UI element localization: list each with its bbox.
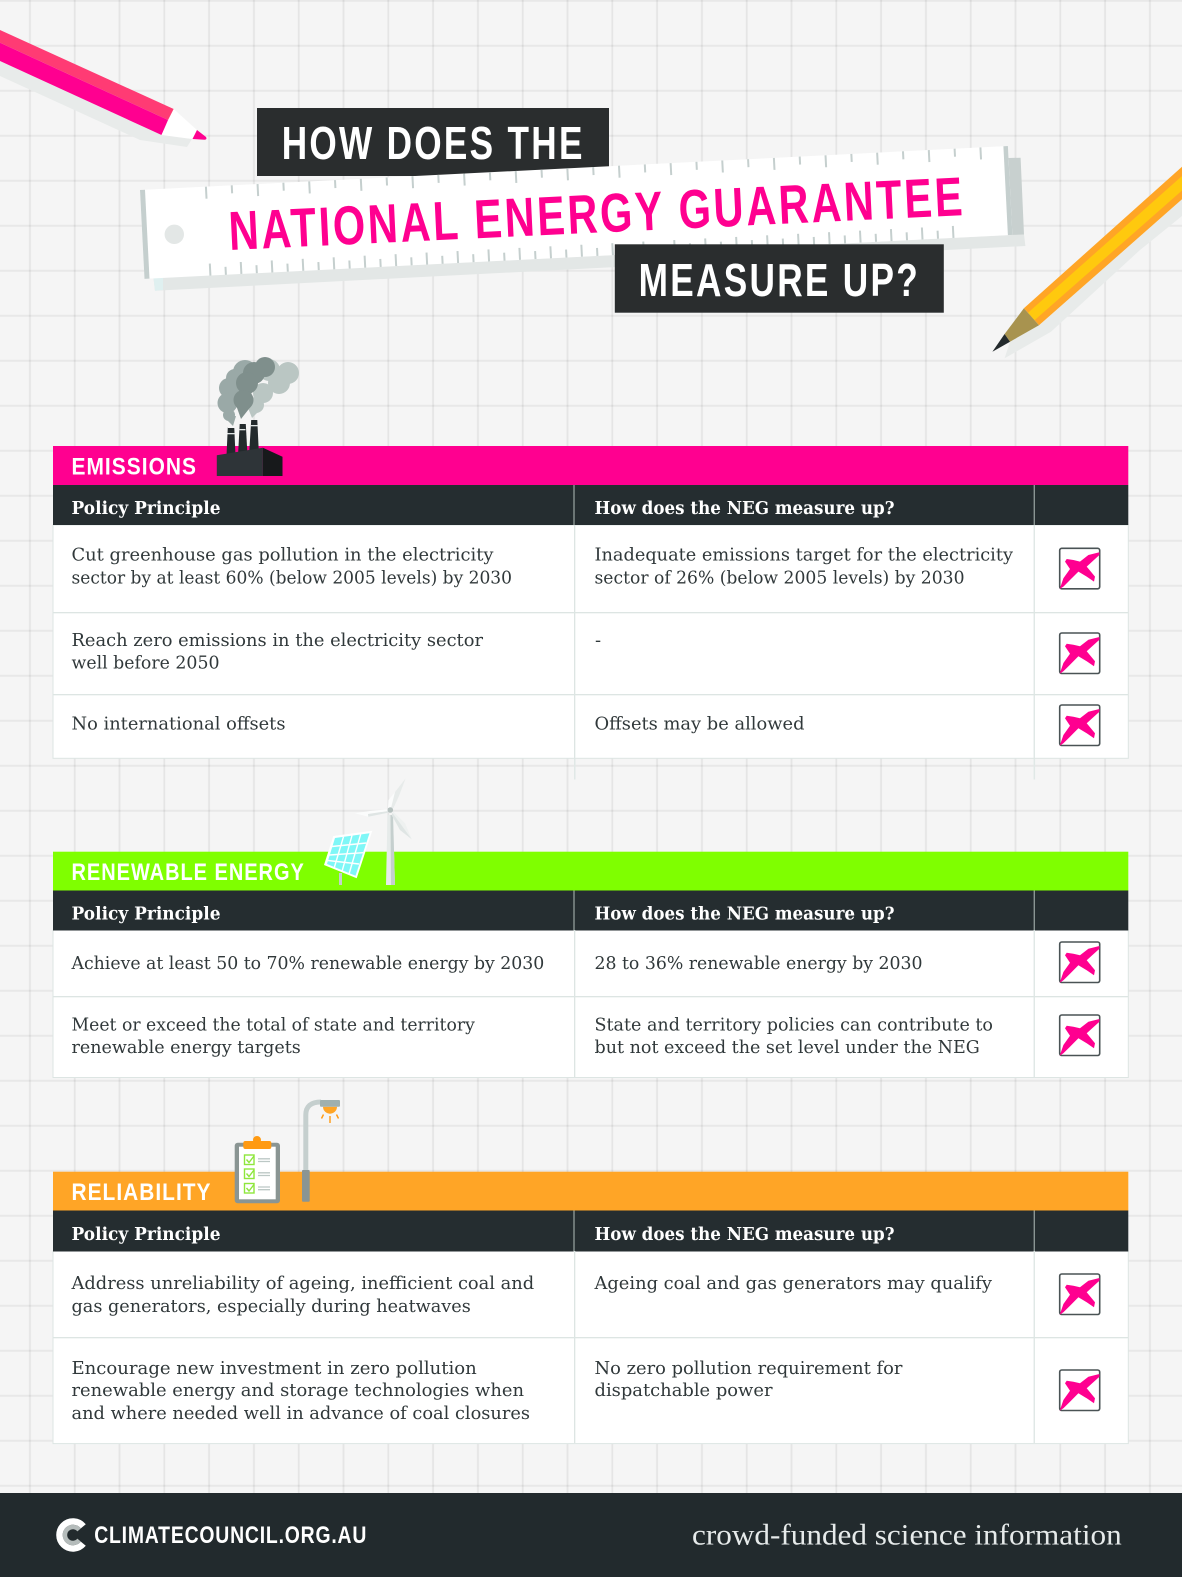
row: achieve renewable energy: 28 to 36% renewable energy by 2030 [594, 953, 922, 974]
row: encourage new investment: dispatchable power [594, 1380, 773, 1401]
icon: cross [1060, 705, 1100, 746]
icon: yellow pencil [992, 167, 1182, 358]
row: state and territory targets: renewable energy targets [72, 1037, 301, 1058]
title: how does the: HOW DOES THE [282, 117, 585, 169]
title: measure up: MEASURE UP? [639, 254, 920, 306]
row: reach zero emissions: - [595, 630, 601, 651]
table header row: Policy Principle [72, 904, 220, 924]
footer url: CLIMATECOUNCIL.ORG.AU [94, 1522, 367, 1549]
icon: cross [1060, 633, 1100, 674]
panel: emissions [53, 357, 1128, 780]
row: encourage new investment: Encourage new investment in zero pollution [72, 1358, 477, 1379]
heading bar: renewable energy [53, 852, 1128, 891]
row: no international offsets [72, 714, 804, 735]
row: unreliability of ageing generators: Address unreliability of ageing, inefficient coal and [71, 1273, 534, 1294]
heading bar: emissions [53, 446, 1128, 485]
footer [0, 1493, 1182, 1577]
table header row: Policy Principle [72, 499, 220, 519]
heading bar: reliability: RELIABILITY [72, 1179, 212, 1206]
table header row [53, 890, 1128, 930]
footer tagline: crowd-funded science information [692, 1518, 1122, 1552]
title: how does the [257, 108, 609, 176]
row: unreliability of ageing generators: Ageing coal and gas generators may qualify [594, 1273, 993, 1294]
heading bar: emissions: EMISSIONS [72, 453, 197, 480]
row: achieve renewable energy: Achieve at least 50 to 70% renewable energy by 2030 [71, 953, 544, 974]
row: state and territory targets: Meet or exceed the total of state and territory [72, 1014, 476, 1036]
row: state and territory targets: but not exceed the set level under the NEG [594, 1037, 980, 1058]
row: state and territory targets: State and territory policies can contribute to [594, 1014, 993, 1036]
row: unreliability of ageing generators [71, 1273, 993, 1317]
row: cut pollution: Cut greenhouse gas pollution in the electricity [72, 545, 494, 566]
panel: renewable energy [53, 778, 1128, 1078]
heading bar: reliability [53, 1172, 1128, 1211]
table header row: Policy Principle [72, 1225, 220, 1245]
row: achieve renewable energy [71, 953, 922, 974]
table header row [53, 1210, 1128, 1252]
heading bar: renewable energy: RENEWABLE ENERGY [72, 859, 305, 886]
table header row [53, 485, 1128, 525]
icon: pink pencil [0, 30, 206, 147]
row: encourage new investment [72, 1358, 903, 1424]
icon: factory with smoke [217, 357, 299, 476]
row: cut pollution: Inadequate emissions target for the electricity [594, 545, 1014, 566]
row: cut pollution [72, 545, 1014, 588]
row: encourage new investment: and where needed well in advance of coal closures [72, 1403, 530, 1424]
table header row: How does the NEG measure up? [594, 1225, 894, 1245]
icon: cross [1060, 548, 1100, 589]
icon: solar panel and wind turbine [324, 778, 412, 885]
icon: cross [1060, 1015, 1100, 1056]
row: encourage new investment: No zero pollution requirement for [594, 1358, 903, 1379]
row: cut pollution: sector of 26% (below 2005 levels) by 2030 [594, 567, 964, 588]
icon: cross [1060, 942, 1100, 983]
icon: cross [1060, 1370, 1100, 1411]
row: cut pollution: sector by at least 60% (below 2005 levels) by 2030 [72, 567, 512, 588]
row: reach zero emissions: Reach zero emissions in the electricity sector [72, 630, 483, 651]
row: unreliability of ageing generators: gas generators, especially during heatwaves [72, 1296, 471, 1317]
panel: reliability [53, 1100, 1128, 1444]
title: measure up [615, 244, 944, 313]
row: reach zero emissions: well before 2050 [72, 652, 220, 673]
icon: clipboard and street lamp [235, 1100, 340, 1203]
row: encourage new investment: renewable energy and storage technologies when [72, 1380, 524, 1401]
table header row: How does the NEG measure up? [594, 499, 894, 519]
ruler with title: national energy guarantee [140, 146, 1025, 291]
icon: cross [1060, 1274, 1100, 1315]
row: no international offsets: No international offsets [72, 714, 286, 735]
table header row: How does the NEG measure up? [594, 904, 894, 924]
row: reach zero emissions [72, 630, 601, 673]
row: state and territory targets [72, 1014, 993, 1058]
ruler with title: national energy guarantee: NATIONAL ENERGY GUARANTEE [227, 165, 966, 262]
icon: climate council logo [59, 1521, 83, 1548]
row: no international offsets: Offsets may be allowed [594, 714, 804, 735]
